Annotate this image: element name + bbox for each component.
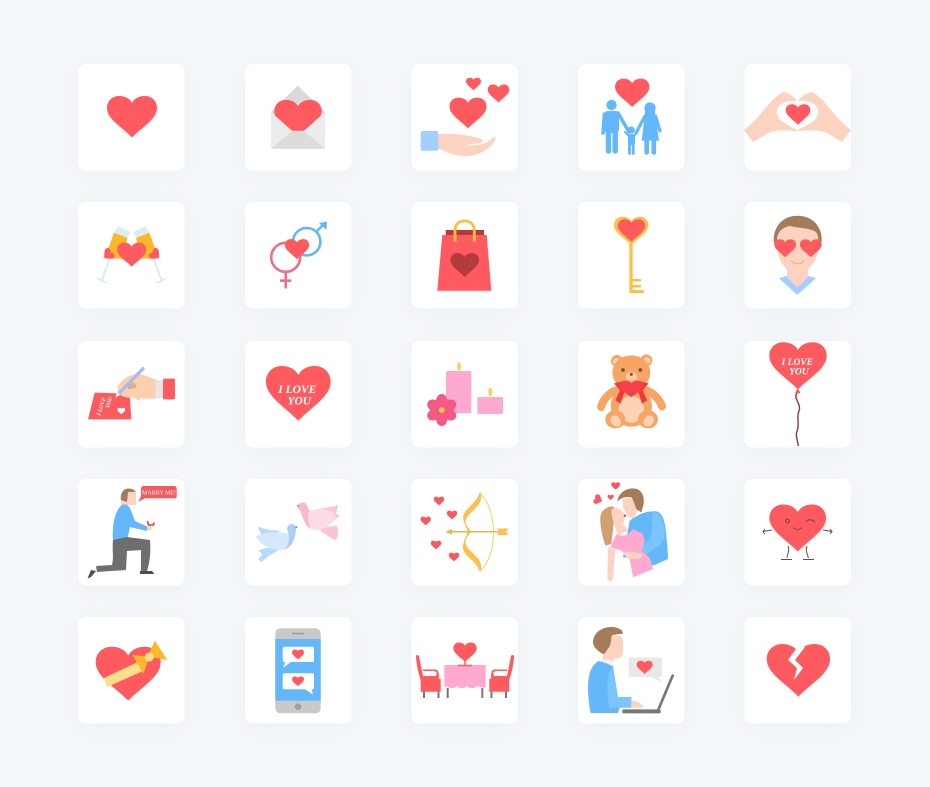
card: balloon (744, 341, 851, 448)
icon: heart balloon: I LOVE (781, 358, 813, 368)
icon: face with heart eyes (774, 216, 822, 295)
card: doves (245, 479, 352, 586)
card: man in love (744, 202, 851, 308)
card: bow and arrow (412, 479, 518, 586)
icon: man at laptop (588, 627, 673, 713)
card: teddy bear (578, 341, 684, 448)
icon: heart with text (266, 366, 331, 421)
icon: two doves (256, 502, 340, 562)
card: toast (78, 202, 184, 308)
card: hand with hearts (412, 64, 518, 170)
icon: shopping bag with heart (437, 221, 491, 291)
icon: candles and flower (425, 362, 503, 426)
card: shopping bag (412, 202, 518, 308)
icon: heart balloon (769, 342, 827, 446)
icon: teddy bear with heart (601, 354, 662, 429)
card: candles (412, 341, 518, 448)
icon: man proposing: MARRY ME! (142, 490, 176, 496)
card: key (578, 202, 684, 308)
icon: envelope with heart (271, 86, 325, 149)
card: writing a card (78, 341, 184, 448)
icon: heart (107, 96, 157, 137)
icon: family with heart (603, 79, 660, 154)
card: kissing couple (578, 479, 684, 586)
card: proposal (78, 479, 184, 586)
icon: cupid bow with hearts (420, 493, 508, 571)
icon: heart with text: YOU (287, 396, 312, 408)
card: heart (78, 64, 184, 170)
icon: heart character (763, 504, 832, 560)
icon: champagne glasses (95, 226, 169, 284)
card: phone (245, 617, 352, 724)
icon: broken heart (767, 644, 830, 697)
card: broken heart (744, 617, 851, 724)
icon: heart balloon: YOU (789, 368, 810, 378)
icon: heart with ribbon bow (96, 641, 167, 701)
icon: hands forming heart (744, 92, 851, 142)
card: I love you heart (245, 341, 352, 448)
icon: couple kissing (593, 482, 668, 581)
icon: heart with text: I LOVE (277, 384, 317, 396)
icon: hand writing love card: YOU (105, 395, 115, 409)
icon: male and female symbols with heart (271, 222, 327, 288)
card: winking heart (744, 479, 851, 586)
card: family (578, 64, 684, 170)
icon: hand writing love card (88, 369, 175, 419)
card: romantic dinner (412, 617, 518, 724)
icon: dinner table with chairs (416, 642, 514, 698)
icon: hand writing love card: I LOVE (96, 397, 108, 417)
card: gift heart (78, 617, 184, 724)
icon: heart key (614, 217, 648, 293)
icon: phone with love messages (275, 628, 321, 713)
card: online love (578, 617, 684, 724)
card: heart hands (744, 64, 851, 170)
icon: hand offering hearts (421, 78, 509, 156)
card: gender symbols (245, 202, 352, 308)
card: love letter (245, 64, 352, 170)
